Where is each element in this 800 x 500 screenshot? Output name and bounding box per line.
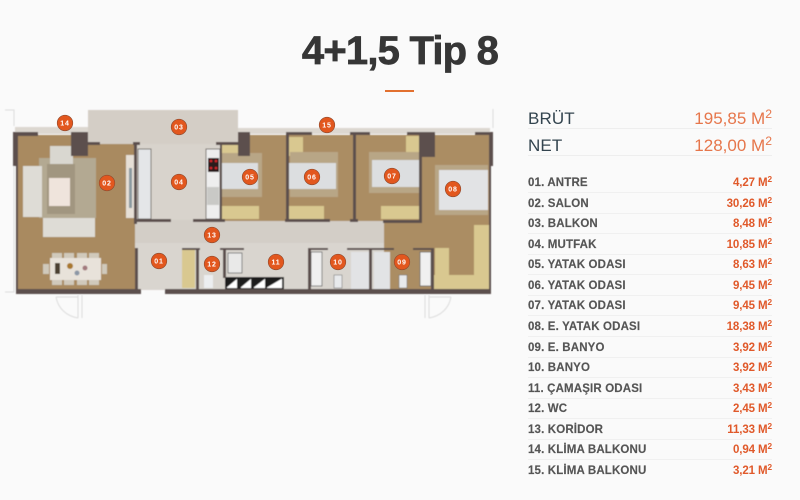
room number markers: 13	[207, 232, 217, 240]
row 07	[528, 296, 772, 316]
room number markers: 14	[60, 120, 70, 128]
gross area: 195,85 M2	[694, 107, 772, 128]
room number markers: 07	[387, 174, 397, 180]
room: balcony 03	[88, 110, 238, 144]
row 15: 15. KLİMA BALKONU	[528, 465, 646, 477]
living room furniture	[23, 146, 135, 285]
row 05: 8,63 M2	[733, 257, 772, 271]
row 13: 11,33 M2	[727, 422, 772, 436]
room number markers: 11	[272, 260, 280, 266]
row 10: 3,92 M2	[733, 360, 772, 374]
title accent rule	[385, 90, 414, 92]
row 01	[528, 173, 772, 193]
row 06: 06. YATAK ODASI	[528, 280, 626, 292]
row 07: 07. YATAK ODASI	[528, 300, 626, 312]
room number markers: 10	[333, 260, 343, 266]
row 10: 10. BANYO	[528, 362, 590, 374]
row 08	[528, 317, 772, 337]
service rooms fittings	[182, 250, 431, 289]
row 02	[528, 194, 772, 214]
row 03: 8,48 M2	[733, 216, 772, 230]
row 09: 3,92 M2	[733, 339, 772, 354]
room number markers: 08	[448, 186, 458, 194]
balcony railings and exterior doors	[5, 109, 493, 318]
row 05: 05. YATAK ODASI	[528, 259, 626, 271]
room number markers	[57, 115, 461, 272]
room number markers: 04	[174, 180, 184, 186]
row 15: 3,21 M2	[733, 463, 772, 477]
gross area	[528, 106, 772, 129]
row 14: 0,94 M2	[733, 442, 772, 456]
row 06	[528, 276, 772, 296]
room number markers: 06	[307, 174, 317, 182]
row 13	[528, 420, 772, 440]
room number markers: 01	[154, 258, 164, 266]
row 04	[528, 235, 772, 255]
row 11: 3,43 M2	[733, 381, 772, 395]
row 08: 08. E. YATAK ODASI	[528, 321, 640, 333]
net area	[528, 133, 772, 156]
floor plan	[5, 109, 494, 318]
row 09	[528, 338, 772, 358]
row 12	[528, 399, 772, 419]
room number markers: 03	[174, 124, 184, 132]
kitchen units	[138, 149, 220, 219]
row 04: 04. MUTFAK	[528, 239, 597, 251]
balcony strips and service floors	[15, 127, 490, 290]
row 02: 30,26 M2	[727, 195, 772, 210]
row 12: 2,45 M2	[733, 401, 772, 415]
row 07: 9,45 M2	[733, 298, 772, 312]
row 03	[528, 214, 772, 234]
row 01: 01. ANTRE	[528, 177, 588, 189]
room: living room floor	[18, 135, 135, 290]
row 12: 12. WC	[528, 403, 567, 415]
net area: 128,00 M2	[694, 134, 772, 155]
gross area: BRÜT	[528, 109, 575, 128]
net area: NET	[528, 136, 562, 155]
row 08: 18,38 M2	[727, 319, 772, 333]
walls	[13, 132, 493, 294]
row 14: 14. KLİMA BALKONU	[528, 444, 646, 456]
row 05	[528, 255, 772, 275]
room area list	[528, 175, 772, 477]
row 01: 4,27 M2	[733, 175, 772, 189]
room number markers: 05	[245, 174, 255, 182]
room number markers: 15	[322, 122, 332, 130]
room number markers: 12	[207, 262, 217, 268]
row 13: 13. KORİDOR	[528, 424, 603, 436]
row 14	[528, 440, 772, 460]
row 11	[528, 379, 772, 399]
row 15	[528, 463, 772, 477]
row 10	[528, 358, 772, 378]
room number markers: 02	[102, 180, 112, 188]
row 09: 09. E. BANYO	[528, 342, 605, 354]
row 06: 9,45 M2	[733, 278, 772, 292]
row 02: 02. SALON	[528, 198, 589, 210]
row 11: 11. ÇAMAŞIR ODASI	[528, 383, 642, 395]
room number markers: 09	[397, 260, 407, 266]
row 04: 10,85 M2	[727, 237, 772, 251]
row 03: 03. BALKON	[528, 218, 598, 230]
title: 4+1,5 Tip 8	[302, 29, 498, 73]
room: bedroom floors	[222, 135, 490, 290]
bedroom furniture	[222, 136, 489, 289]
